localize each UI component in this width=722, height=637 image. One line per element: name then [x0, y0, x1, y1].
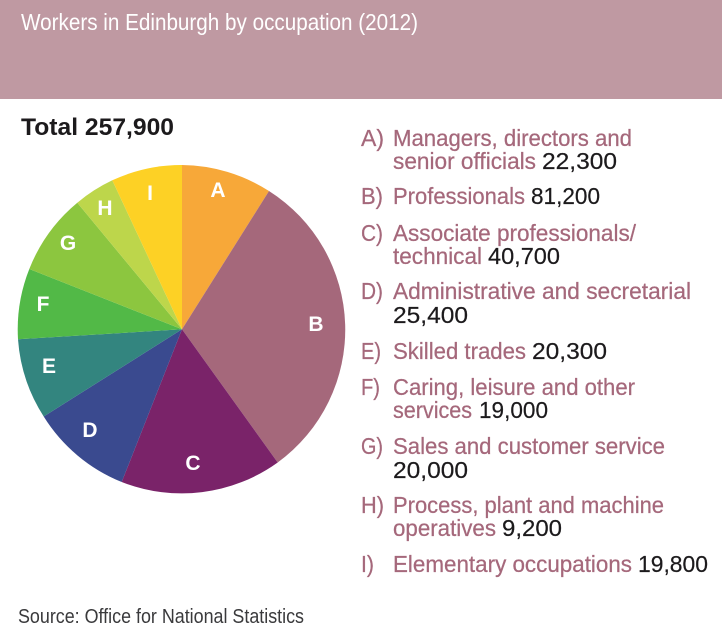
slice F [18, 269, 182, 339]
legend item D: Administrative and secretarial [393, 278, 691, 304]
legend item C: Associate professionals/ [393, 220, 637, 246]
legend item G: Sales and customer service [393, 433, 665, 459]
slice letters: E [42, 355, 56, 378]
legend item B [361, 183, 600, 209]
legend item H: Process, plant and machine [393, 492, 664, 518]
slice letters: D [82, 419, 98, 442]
slice letters: H [97, 197, 113, 220]
legend item B: B) [361, 183, 383, 209]
header band [0, 0, 722, 99]
legend item I: Elementary occupations [393, 551, 632, 577]
legend item E [361, 338, 607, 364]
source note: Source: Office for National Statistics [18, 606, 304, 628]
legend item A: Managers, directors and [393, 125, 632, 151]
legend [361, 125, 708, 577]
legend item D: D) [361, 278, 383, 304]
slice letters: B [308, 313, 324, 336]
legend item A: 22,300 [542, 148, 617, 174]
legend item D: 25,400 [393, 302, 468, 328]
legend item G: 20,000 [393, 457, 468, 483]
legend item B: 81,200 [531, 183, 600, 209]
pie chart [18, 165, 345, 493]
slice D [44, 329, 182, 482]
legend item F: Caring, leisure and other [393, 374, 635, 400]
legend item C: 40,700 [488, 243, 560, 269]
legend item G: G) [361, 433, 383, 459]
title: Workers in Edinburgh by occupation (2012) [21, 9, 418, 35]
legend item F: services [393, 397, 472, 423]
legend item I: 19,800 [638, 551, 708, 577]
legend item B: Professionals [393, 183, 525, 209]
legend item H: 9,200 [502, 515, 562, 541]
slice H [77, 180, 182, 329]
legend item G [361, 433, 665, 483]
legend item C: C) [361, 220, 383, 246]
slice C [122, 329, 278, 493]
legend item A [361, 125, 632, 174]
slice letters: F [37, 293, 50, 316]
legend item C [361, 220, 637, 269]
legend item F [361, 374, 635, 423]
legend item H: operatives [393, 515, 496, 541]
slice A [182, 165, 269, 329]
legend item F: 19,000 [479, 397, 548, 423]
slice B [182, 191, 345, 462]
legend item E: Skilled trades [393, 338, 526, 364]
legend item D [361, 278, 691, 328]
legend item E: 20,300 [532, 338, 607, 364]
slice G [29, 203, 182, 329]
legend item I: I) [361, 551, 374, 577]
slice E [18, 329, 182, 416]
slice letters [37, 179, 324, 475]
slice I [112, 165, 182, 329]
legend item F: F) [361, 374, 380, 400]
legend item C: technical [393, 243, 482, 269]
slice letters: A [210, 179, 226, 202]
legend item A: A) [361, 125, 384, 151]
legend item H [361, 492, 664, 541]
slice letters: I [147, 182, 153, 205]
total label: Total 257,900 [21, 114, 174, 141]
legend item A: senior officials [393, 148, 536, 174]
slice letters: C [185, 452, 201, 475]
legend item H: H) [361, 492, 384, 518]
legend item E: E) [361, 338, 381, 364]
slice letters: G [60, 232, 76, 255]
